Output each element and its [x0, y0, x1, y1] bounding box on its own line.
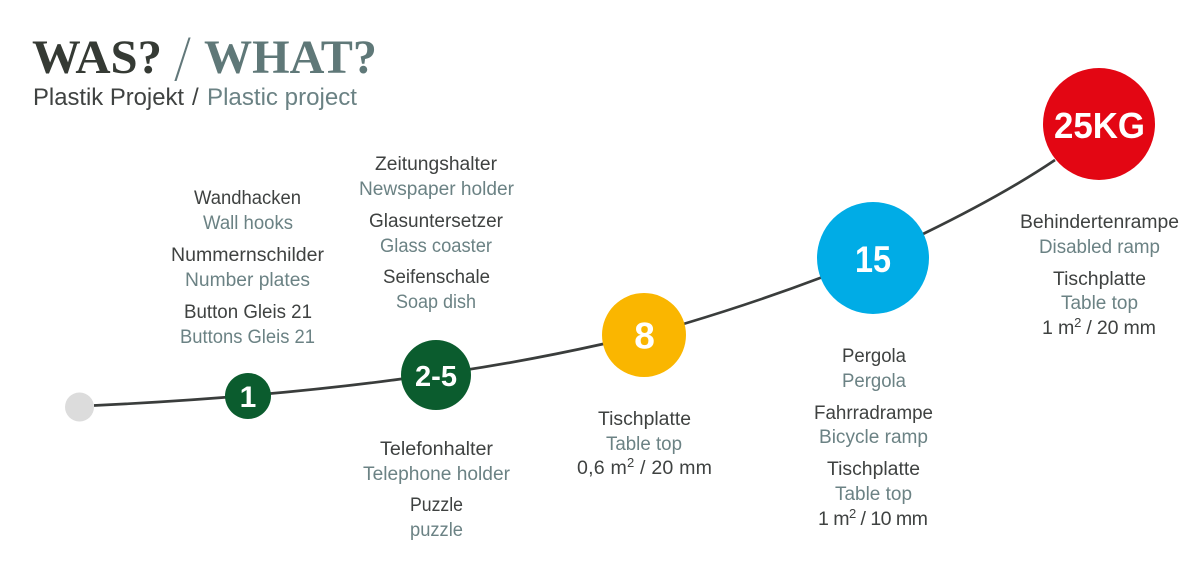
- text: items for 8: Table top: [606, 434, 682, 455]
- text: items for 25KG: 1 m: [1042, 317, 1074, 339]
- subtitle: Plastik Projekt: [33, 84, 184, 111]
- marker 25KG: 25KG: [1054, 105, 1145, 146]
- text: items for 1: Wall hooks: [203, 213, 293, 234]
- text: items below 2-5: Telephone holder: [363, 464, 511, 485]
- text: items above 2-5: Glasuntersetzer: [369, 211, 504, 232]
- marker 25KG: [1043, 68, 1155, 180]
- timeline curve: [94, 160, 1055, 406]
- marker 8: 8: [634, 316, 655, 356]
- text: items for 15: / 10 mm: [856, 508, 928, 530]
- text: items for 8: / 20 mm: [634, 457, 712, 479]
- text: items for 25KG: 2: [1074, 315, 1081, 330]
- text: items below 2-5: [363, 439, 511, 541]
- text: items for 15: Fahrradrampe: [814, 403, 933, 424]
- marker 2-5: [401, 340, 471, 410]
- text: items for 15: Table top: [835, 484, 912, 505]
- subtitle: [33, 84, 357, 111]
- marker 2-5: 2-5: [415, 361, 457, 393]
- text: items for 8: 0,6 m: [577, 457, 627, 479]
- text: items for 25KG: [1020, 212, 1179, 339]
- text: items for 1: Wandhacken: [194, 188, 301, 209]
- text: items for 25KG: Disabled ramp: [1039, 237, 1160, 258]
- title: WHAT?: [204, 31, 377, 84]
- text: items for 15: 2: [849, 506, 856, 521]
- text: items below 2-5: puzzle: [410, 520, 463, 541]
- marker 15: 15: [855, 239, 891, 280]
- text: items for 8: Tischplatte: [598, 409, 691, 430]
- text: items above 2-5: Glass coaster: [380, 236, 493, 257]
- start point: [65, 392, 94, 422]
- text: items for 1: Number plates: [185, 270, 310, 291]
- text: items for 15: Bicycle ramp: [819, 427, 928, 448]
- text: items for 1: Nummernschilder: [171, 245, 325, 266]
- title: WAS?: [32, 31, 162, 84]
- text: items for 1: Button Gleis 21: [184, 302, 312, 323]
- text: items for 8: 2: [627, 455, 634, 470]
- text: items above 2-5: [359, 154, 515, 313]
- subtitle: Plastic project: [207, 84, 357, 111]
- text: items for 25KG: Table top: [1061, 293, 1138, 314]
- text: items for 15: Tischplatte: [827, 459, 920, 480]
- text: items for 8: [577, 409, 712, 479]
- text: items for 15: 1 m: [818, 508, 850, 530]
- text: items above 2-5: Seifenschale: [383, 267, 490, 288]
- text: items for 25KG: Behindertenrampe: [1020, 212, 1179, 233]
- text: items for 15: Pergola: [842, 346, 906, 367]
- text: items for 1: Buttons Gleis 21: [180, 327, 315, 348]
- marker 8: [602, 293, 686, 377]
- text: items for 1: [171, 188, 325, 348]
- text: items below 2-5: Telefonhalter: [380, 439, 494, 460]
- title: /: [172, 26, 194, 96]
- marker 1: 1: [240, 381, 256, 414]
- text: items for 15: [814, 346, 933, 530]
- marker 15: [817, 202, 929, 314]
- marker 1: [225, 373, 271, 419]
- text: items above 2-5: Zeitungshalter: [375, 154, 498, 175]
- title: [32, 26, 377, 96]
- text: items above 2-5: Newspaper holder: [359, 179, 515, 200]
- subtitle: /: [192, 84, 199, 111]
- text: items above 2-5: Soap dish: [396, 292, 476, 313]
- text: items below 2-5: Puzzle: [410, 495, 463, 516]
- text: items for 25KG: / 20 mm: [1081, 317, 1156, 339]
- text: items for 15: Pergola: [842, 371, 906, 392]
- text: items for 25KG: Tischplatte: [1053, 269, 1146, 290]
